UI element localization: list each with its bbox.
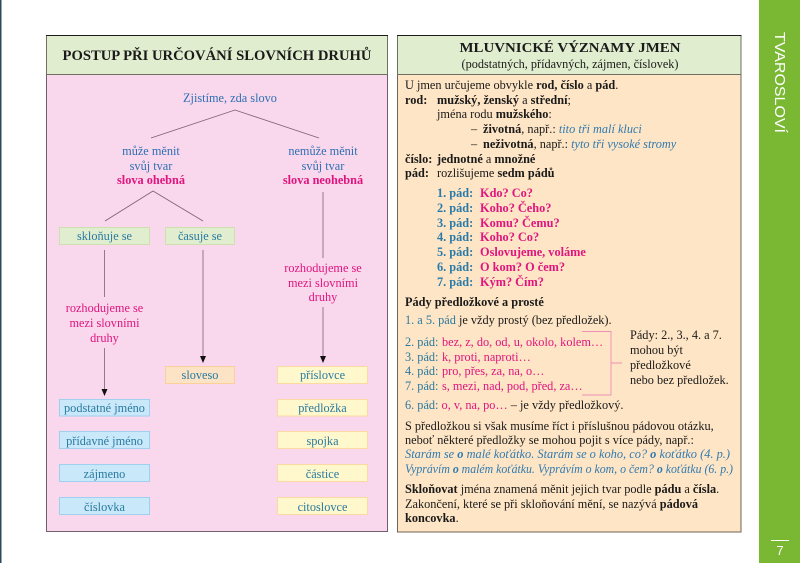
list: neohebné druhy: částice xyxy=(306,467,340,481)
text block: předložka a otázka: S předložkou si však musíme říct i příslušnou pádovou otázku, xyxy=(405,419,714,433)
list: neohebné druhy: příslovce xyxy=(300,368,346,382)
list: neohebné druhy: citoslovce xyxy=(298,500,348,514)
heading: postup: POSTUP PŘI URČOVÁNÍ SLOVNÍCH DRUHŮ xyxy=(62,47,372,64)
list: pády s předložkami: s, mezi, nad, pod, před, za… xyxy=(442,379,583,393)
list: pády s předložkami: 2. pád: xyxy=(405,335,438,349)
text block: rod číslo pád: rod: xyxy=(405,93,427,107)
text block: rozhodujeme left: rozhodujeme se xyxy=(66,301,144,315)
list: sedm pádů: 3. pád: xyxy=(437,216,473,230)
text block: skloňovat: Skloňovat jména znamená měnit jejich tvar podle pádu a čísla. xyxy=(405,482,719,496)
heading: mluvnické významy xyxy=(397,36,742,74)
list: neohebné druhy: předložka xyxy=(298,401,347,415)
list: neohebné druhy xyxy=(278,366,368,514)
text block: rozhodujeme right xyxy=(284,261,362,304)
callout: pády 2, 3, 4, 7: předložkové xyxy=(630,358,691,372)
box: časuje se: časuje se xyxy=(178,229,223,243)
text block: předložka a otázka: neboť některé předložky se mohou pojit s více pády, např.: xyxy=(405,433,694,447)
list: sedm pádů: 2. pád: xyxy=(437,201,473,215)
panel: postup při určování slovních druhů xyxy=(46,36,388,532)
subheading: pády předložkové a prosté: Pády předložkové a prosté xyxy=(405,295,544,309)
text block: slova neohebná: slova neohebná xyxy=(283,173,363,187)
callout: pády 2, 3, 4, 7: nebo bez předložek. xyxy=(630,373,729,387)
heading: mluvnické významy: MLUVNICKÉ VÝZNAMY JMEN xyxy=(460,39,680,56)
arrow: to příslovce xyxy=(320,307,326,363)
text block: slova ohebná: svůj tvar xyxy=(130,159,172,173)
text block: slova neohebná: nemůže měnit xyxy=(288,144,358,158)
list: sedm pádů: Kým? Čím? xyxy=(480,275,544,289)
list: sedm pádů: Koho? Co? xyxy=(480,230,539,244)
text block: rod číslo pád: číslo: xyxy=(405,152,432,166)
text block: slova ohebná: může měnit xyxy=(122,144,180,158)
callout: pády 2, 3, 4, 7: mohou být xyxy=(630,343,684,357)
branch lines: first split xyxy=(151,110,319,138)
sidebar: tvarosloví xyxy=(759,0,800,563)
list: sedm pádů: Komu? Čemu? xyxy=(480,216,560,230)
list: pády s předložkami: 4. pád: xyxy=(405,364,438,378)
text block: rod číslo pád: jména rodu mužského: xyxy=(436,107,552,121)
text block: rod číslo pád: životná, např.: tito tři malí kluci xyxy=(483,122,642,136)
text block: rozhodujeme right: rozhodujeme se xyxy=(284,261,362,275)
text block: slova ohebná: slova ohebná xyxy=(117,173,185,187)
list: pády s předložkami: 7. pád: xyxy=(405,379,438,393)
text block: rod číslo pád: – xyxy=(470,137,478,151)
text block: předložka a otázka xyxy=(405,419,733,476)
list: sedm pádů: 7. pád: xyxy=(437,275,473,289)
list: pády s předložkami: 3. pád: xyxy=(405,350,438,364)
text block: skloňovat xyxy=(405,482,719,525)
text block: rod číslo pád: rozlišujeme sedm pádů xyxy=(437,166,555,180)
callout: pády 2, 3, 4, 7 xyxy=(630,328,729,387)
list: pády s předložkami: pro, přes, za, na, o… xyxy=(442,364,544,378)
list: sedm pádů: 5. pád: xyxy=(437,245,473,259)
text block: rod číslo pád: neživotná, např.: tyto tři vysoké stromy xyxy=(483,137,677,151)
list: ohebné druhy: přídavné jméno xyxy=(66,434,143,448)
arrow: to sloveso xyxy=(200,250,206,363)
text block: slova neohebná: svůj tvar xyxy=(302,159,344,173)
list: neohebné druhy: spojka xyxy=(306,434,339,448)
bracket xyxy=(582,332,622,395)
text block: rod číslo pád xyxy=(405,78,677,180)
list: pády s předložkami xyxy=(405,335,603,393)
line: skloňuje se down xyxy=(104,250,106,297)
text block: rod číslo pád: mužský, ženský a střední; xyxy=(437,93,571,107)
text block: rozhodujeme left: mezi slovními xyxy=(69,316,140,330)
panel: mluvnické významy jmen xyxy=(397,36,742,532)
text block: rod číslo pád: jednotné a množné xyxy=(436,152,536,166)
list: sedm pádů: O kom? O čem? xyxy=(480,260,565,274)
text block: rod číslo pád: pád: xyxy=(405,166,429,180)
list: ohebné druhy: zájmeno xyxy=(84,467,125,481)
list: sedm pádů: 1. pád: xyxy=(437,186,473,200)
heading: mluvnické významy: (podstatných, přídavných, zájmen, číslovek) xyxy=(462,57,678,71)
text block: rod číslo pád: – xyxy=(470,122,478,136)
list: sedm pádů: 6. pád: xyxy=(437,260,473,274)
sidebar label: TVAROSLOVÍ xyxy=(771,32,788,134)
list: ohebné druhy: podstatné jméno xyxy=(64,401,145,415)
text: zjistíme: Zjistíme, zda slovo xyxy=(183,91,277,105)
text block: slova neohebná xyxy=(283,144,363,187)
page number: 7 xyxy=(776,543,784,558)
box: skloňuje se xyxy=(60,228,150,244)
list: sedm pádů: 4. pád: xyxy=(437,230,473,244)
text block: rozhodujeme left xyxy=(66,301,144,345)
box: skloňuje se: skloňuje se xyxy=(77,229,133,243)
heading: postup xyxy=(46,36,388,74)
text block: předložka a otázka: Vyprávím o malém koťátku. Vyprávím o kom, o čem? o koťátku (6. p.) xyxy=(405,462,733,476)
text block: předložka a otázka: Starám se o malé koťátko. Starám se o koho, co? o koťátko (4. p.) xyxy=(405,447,730,461)
text block: skloňovat: Zakončení, které se při skloňování mění, se nazývá pádová xyxy=(405,497,698,511)
box: sloveso: sloveso xyxy=(182,368,218,382)
box: časuje se xyxy=(166,228,234,244)
text block: skloňovat: koncovka. xyxy=(405,511,459,525)
text block: rozhodujeme right: mezi slovními xyxy=(288,276,359,290)
callout: pády 2, 3, 4, 7: Pády: 2., 3., 4. a 7. xyxy=(630,328,722,342)
text block: rozhodujeme right: druhy xyxy=(309,290,338,304)
arrow: to jména xyxy=(102,348,108,396)
page number xyxy=(771,540,789,558)
text block: rozhodujeme left: druhy xyxy=(90,331,120,345)
text block: rod číslo pád: U jmen určujeme obvykle rod, číslo a pád. xyxy=(405,78,618,92)
text: 1. a 5. pád: 1. a 5. pád je vždy prostý (bez předložek). xyxy=(405,313,612,327)
list: ohebné druhy xyxy=(60,400,150,514)
list: ohebné druhy: číslovka xyxy=(84,500,126,514)
list: sedm pádů: Kdo? Co? xyxy=(480,186,533,200)
text block: slova ohebná xyxy=(117,144,185,187)
text: 6. pád: 6. pád: o, v, na, po… – je vždy předložkový. xyxy=(405,398,623,412)
list: sedm pádů xyxy=(437,186,586,289)
box: sloveso xyxy=(166,366,234,384)
list: sedm pádů: Oslovujeme, voláme xyxy=(480,245,586,259)
list: sedm pádů: Koho? Čeho? xyxy=(480,201,551,215)
list: pády s předložkami: bez, z, do, od, u, okolo, kolem… xyxy=(442,335,603,349)
list: pády s předložkami: k, proti, naproti… xyxy=(442,350,531,364)
line: neohebná down xyxy=(322,192,324,258)
branch lines: second split xyxy=(105,191,203,221)
